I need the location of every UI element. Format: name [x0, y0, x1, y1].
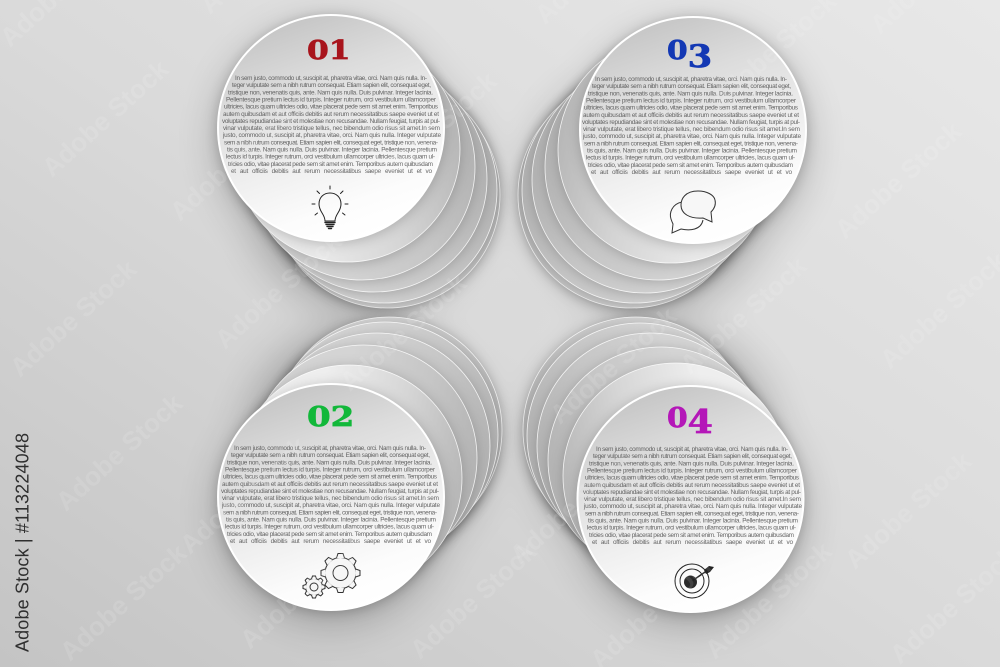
centre glow: [454, 254, 570, 370]
text block 02: sem a nibh rutrum consequat. Etiam sapien elit, consequat eget, tristique non, venena-: [223, 509, 437, 516]
watermarks: Adobe Stock: [364, 65, 503, 194]
watermarks: Adobe Stock: [36, 53, 175, 182]
stock id label: Adobe Stock | #113224048: [12, 433, 32, 652]
text block 04: vinar vulputate, erat libero tristique tellus, nec bibendum odio risus sit amet.In sem: [584, 496, 801, 503]
text block 04: Pellentesque pretium lectus id turpis. Integer rutrum, orci vestibulum ullamcorper: [587, 468, 798, 474]
text block 02: tristique non, venenatis quis, ante. Nam quis nulla. Duis pulvinar. Integer lacinia.: [227, 459, 432, 466]
watermarks: Adobe Stock: [674, 250, 813, 379]
text block 01: tis quis, ante. Nam quis nulla. Duis pulvinar. Integer lacinia. Pellentesque pretium: [227, 146, 437, 154]
front disc 04: [578, 386, 804, 612]
watermarks: Adobe Stock: [209, 225, 348, 354]
back discs 01: [234, 36, 500, 308]
number 04: 0: [667, 401, 688, 434]
text block 01: tristique non, venenatis quis, ante. Nam quis nulla. Duis pulvinar. Integer lacinia.: [228, 89, 433, 96]
text block 02: In sem justo, commodo ut, suscipit at, pharetra vitae, orci. Nam quis nulla. In-: [234, 445, 426, 452]
watermarks: Adobe Stock: [164, 97, 303, 226]
text block 01: Pellentesque pretium lectus id turpis. Integer rutrum, orci vestibulum ullamcorper: [226, 96, 437, 104]
text block 03: Pellentesque pretium lectus id turpis. Integer rutrum, orci vestibulum ullamcorper: [586, 98, 797, 104]
front disc 02: [218, 384, 444, 610]
back discs 03: [518, 37, 784, 308]
text block 04: sem a nibh rutrum consequat. Etiam sapien elit, consequat eget, tristique non, venena-: [585, 510, 799, 517]
text block 02: et aut officiis debitis aut rerum necessitatibus saepe eveniet ut et vo: [230, 538, 431, 545]
text block 04: tricies odio, vitae placerat pede sem sit amet enim. Temporibus autem quibusdam: [589, 532, 794, 539]
text block 04: et aut officiis debitis aut rerum necessitatibus saepe eveniet ut et vo: [592, 539, 793, 546]
text block 04: [583, 446, 802, 546]
number 01: 01: [307, 34, 351, 65]
text block 03: [582, 76, 801, 176]
text block 01: vinar vulputate, erat libero tristique tellus, nec bibendum odio risus sit amet.In sem: [223, 125, 440, 132]
text block 03: vinar vulputate, erat libero tristique tellus, nec bibendum odio risus sit amet.In sem: [583, 126, 800, 133]
text block 03: autem quibusdam et aut officiis debitis aut rerum necessitatibus saepe eveniet ut et: [583, 112, 799, 119]
watermarks: Adobe Stock: [234, 525, 373, 654]
watermarks: Adobe Stock: [54, 537, 193, 666]
icon: gears: [303, 554, 360, 598]
text block 04: In sem justo, commodo ut, suscipit at, pharetra vitae, orci. Nam quis nulla. In-: [596, 446, 788, 453]
watermarks: Adobe Stock: [404, 535, 543, 664]
text block 01: justo, commodo ut, suscipit at, pharetra vitae, orci. Nam quis nulla. Integer vulputate: [222, 132, 441, 139]
watermarks: Adobe Stock: [544, 300, 683, 429]
text block 04: ultricies, lacus quam ultricies odio, vitae placerat pede sem sit amet enim. Temporibus: [585, 475, 799, 482]
text block 03: tristique non, venenatis quis, ante. Nam quis nulla. Duis pulvinar. Integer lacinia.: [588, 90, 793, 97]
text block 02: tis quis, ante. Nam quis nulla. Duis pulvinar. Integer lacinia. Pellentesque pretium: [226, 516, 436, 524]
icon: speech bubbles: [670, 191, 715, 233]
text block 04: teger vulputate sem a nibh rutrum consequat. Etiam sapien elit, consequat eget,: [593, 453, 792, 460]
text block 04: lectus id turpis. Integer rutrum, orci vestibulum ullamcorper ultricies, lacus quam ul-: [587, 525, 796, 532]
text block 02: lectus id turpis. Integer rutrum, orci vestibulum ullamcorper ultricies, lacus quam ul-: [225, 524, 434, 531]
panel: stack 02: [218, 317, 502, 610]
watermarks: Adobe Stock: [839, 445, 978, 574]
text block 02: autem quibusdam et aut officiis debitis aut rerum necessitatibus saepe eveniet ut et: [222, 481, 438, 488]
watermarks: Adobe Stock: [334, 267, 473, 396]
text block 02: vinar vulputate, erat libero tristique tellus, nec bibendum odio risus sit amet.In sem: [222, 495, 439, 502]
text block 01: autem quibusdam et aut officiis debitis aut rerum necessitatibus saepe eveniet ut et: [223, 111, 439, 118]
text block 01: [222, 75, 441, 175]
text block 01: voluptates repudiandae sint et molestiae non recusandae. Nullam feugiat, turpis at pul-: [222, 118, 440, 125]
text block 02: voluptates repudiandae sint et molestiae non recusandae. Nullam feugiat, turpis at pul-: [221, 488, 439, 495]
text block 01: teger vulputate sem a nibh rutrum consequat. Etiam sapien elit, consequat eget,: [232, 82, 431, 89]
watermarks: Adobe Stock: [174, 430, 313, 559]
front disc 03: [580, 17, 806, 243]
text block 02: [221, 445, 440, 545]
panel: stack 04: [523, 317, 804, 612]
text block 01: et aut officiis debitis aut rerum necessitatibus saepe eveniet ut et vo: [231, 168, 432, 175]
panel: stack 03: [518, 17, 806, 308]
text block 03: justo, commodo ut, suscipit at, pharetra vitae, orci. Nam quis nulla. Integer vulputate: [582, 133, 801, 140]
text block 03: et aut officiis debitis aut rerum necessitatibus saepe eveniet ut et vo: [591, 169, 792, 176]
text block 03: tricies odio, vitae placerat pede sem sit amet enim. Temporibus autem quibusdam: [588, 162, 793, 169]
watermarks: Adobe Stock: [504, 440, 643, 569]
text block 03: tis quis, ante. Nam quis nulla. Duis pulvinar. Integer lacinia. Pellentesque pretium: [587, 148, 797, 154]
text block 02: Pellentesque pretium lectus id turpis. Integer rutrum, orci vestibulum ullamcorper: [225, 466, 436, 474]
panel: stack 01: [218, 15, 500, 308]
text block 01: In sem justo, commodo ut, suscipit at, pharetra vitae, orci. Nam quis nulla. In-: [235, 75, 427, 82]
text block 02: tricies odio, vitae placerat pede sem sit amet enim. Temporibus autem quibusdam: [227, 531, 432, 538]
watermarks: Adobe Stock: [4, 253, 143, 382]
back discs 02: [236, 317, 502, 591]
text block 02: ultricies, lacus quam ultricies odio, vitae placerat pede sem sit amet enim. Temporibus: [223, 474, 437, 481]
text block 01: sem a nibh rutrum consequat. Etiam sapien elit, consequat eget, tristique non, venena-: [224, 139, 438, 146]
text block 03: In sem justo, commodo ut, suscipit at, pharetra vitae, orci. Nam quis nulla. In-: [595, 76, 787, 83]
number 03: 0: [667, 35, 688, 66]
text block 02: teger vulputate sem a nibh rutrum consequat. Etiam sapien elit, consequat eget,: [231, 452, 430, 459]
icon: target with arrow: [675, 564, 714, 598]
text block 04: tis quis, ante. Nam quis nulla. Duis pulvinar. Integer lacinia. Pellentesque pretium: [588, 518, 798, 524]
text block 01: ultricies, lacus quam ultricies odio, vitae placerat pede sem sit amet enim. Temporibus: [224, 104, 438, 111]
number 02: 02: [307, 401, 354, 433]
watermarks: Adobe Stock: [50, 387, 189, 516]
text block 04: voluptates repudiandae sint et molestiae non recusandae. Nullam feugiat, turpis at pul-: [583, 489, 801, 496]
text block 03: teger vulputate sem a nibh rutrum consequat. Etiam sapien elit, consequat eget,: [592, 83, 791, 90]
icon: light bulb: [312, 186, 348, 228]
text block 01: tricies odio, vitae placerat pede sem sit amet enim. Temporibus autem quibusdam: [228, 161, 433, 168]
front disc 01: [218, 15, 444, 241]
text block 03: ultricies, lacus quam ultricies odio, vitae placerat pede sem sit amet enim. Temporibus: [584, 105, 798, 112]
back discs 04: [523, 317, 789, 589]
number 04: 4: [688, 403, 713, 442]
number 03: 3: [688, 38, 712, 74]
watermarks: Adobe Stock: [829, 115, 968, 244]
text block 01: lectus id turpis. Integer rutrum, orci vestibulum ullamcorper ultricies, lacus quam ul-: [226, 154, 435, 161]
text block 04: autem quibusdam et aut officiis debitis aut rerum necessitatibus saepe eveniet ut et: [584, 482, 800, 489]
text block 04: tristique non, venenatis quis, ante. Nam quis nulla. Duis pulvinar. Integer lacinia.: [589, 460, 794, 467]
text block 02: justo, commodo ut, suscipit at, pharetra vitae, orci. Nam quis nulla. Integer vulputate: [221, 502, 440, 509]
text block 04: justo, commodo ut, suscipit at, pharetra vitae, orci. Nam quis nulla. Integer vulputate: [583, 503, 802, 510]
text block 03: sem a nibh rutrum consequat. Etiam sapien elit, consequat eget, tristique non, venena-: [584, 140, 798, 147]
watermarks: Adobe Stock: [699, 535, 838, 664]
soft stack shadows: [216, 26, 807, 626]
text block 03: voluptates repudiandae sint et molestiae non recusandae. Nullam feugiat, turpis at pul-: [582, 119, 800, 126]
text block 03: lectus id turpis. Integer rutrum, orci vestibulum ullamcorper ultricies, lacus quam ul-: [586, 155, 795, 162]
